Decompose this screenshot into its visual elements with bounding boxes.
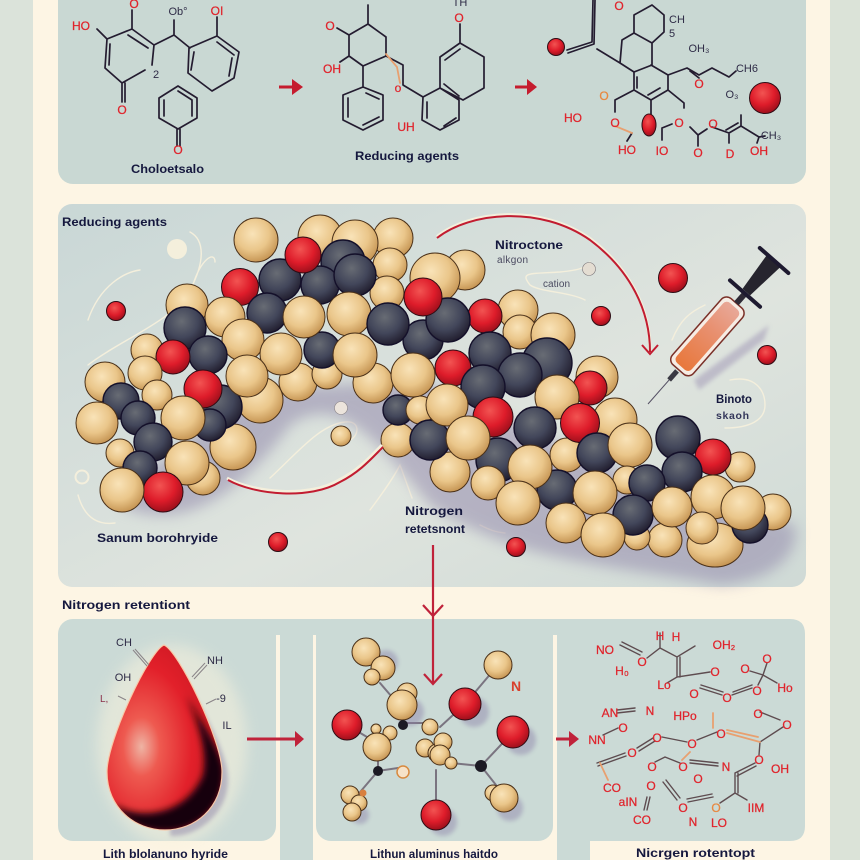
- label: reducing agents: Reducing agents: [355, 149, 459, 163]
- structure: product molecule: [548, 0, 781, 161]
- label: nitroctone: Nitroctone: [495, 238, 563, 252]
- structure: starting molecule: [72, 0, 239, 157]
- arrow: step one: [279, 79, 303, 95]
- atom labels: Lo: [657, 678, 671, 692]
- label: cation: cation: [543, 279, 570, 290]
- structure: starting molecule: HO: [72, 19, 90, 33]
- structure: product molecule: O: [599, 89, 609, 103]
- atom labels: O: [646, 779, 656, 793]
- caption tab: nitrogen retentiont: Nicrgen rotentopt: [636, 846, 755, 860]
- drop shadow: [170, 660, 228, 836]
- structure: product molecule: 5: [669, 28, 675, 40]
- structure: intermediate molecule: UH: [397, 120, 415, 134]
- structure: product molecule: HO: [564, 111, 582, 125]
- structure: intermediate molecule: OH: [323, 62, 341, 76]
- label: cholesterol: Choloetsalo: [131, 162, 204, 176]
- atom labels: N: [722, 760, 730, 774]
- annotations around drop: OH: [115, 672, 131, 684]
- atom labels: CO: [603, 781, 621, 795]
- annotations around drop: [100, 637, 232, 732]
- atom labels: O: [711, 801, 721, 815]
- atom labels: O: [752, 684, 762, 698]
- structure: product molecule: CH6: [736, 63, 758, 75]
- structure: starting molecule: OI: [211, 4, 223, 18]
- decorative cream swirls: [76, 232, 765, 533]
- curved arrow: upper: [437, 215, 658, 354]
- atom labels: O: [710, 665, 720, 679]
- caption tab: nitrogen retentiont: [590, 841, 830, 860]
- molecule shadow: [120, 380, 796, 585]
- atom labels: H: [656, 629, 664, 643]
- structure: intermediate molecule: O: [454, 11, 464, 25]
- sticks: [347, 665, 513, 800]
- atoms: [332, 638, 529, 830]
- atoms shadows: [351, 650, 536, 836]
- structure: intermediate molecule: [323, 0, 484, 134]
- atom labels: O: [652, 731, 662, 745]
- atom labels: OH₂: [713, 638, 736, 652]
- atom labels: O: [678, 801, 688, 815]
- label: alkgon: alkgon: [497, 255, 528, 266]
- arrow: vertical from centre: [423, 545, 443, 684]
- structure: product molecule: CH₃: [761, 130, 781, 142]
- structure: product molecule: OH: [750, 144, 768, 158]
- atom labels: HPo: [673, 709, 697, 723]
- annotations around drop: IL: [222, 720, 232, 732]
- molecule: large space-filling cluster: [76, 215, 791, 567]
- atom labels: LO: [711, 816, 727, 830]
- label: retentiont: retetsnont: [405, 522, 465, 536]
- atom labels: CO: [633, 813, 651, 827]
- label: nitrogen retentiont middle: Nitrogen: [405, 504, 463, 518]
- atom labels: N: [646, 704, 654, 718]
- structure: product molecule: O: [674, 116, 684, 130]
- atom labels: AN: [602, 706, 618, 720]
- annotations around drop: CH: [116, 637, 132, 649]
- atom labels: IIM: [748, 801, 764, 815]
- atom labels: O: [753, 707, 763, 721]
- atom labels: O: [678, 760, 688, 774]
- arrow: step two: [515, 79, 537, 95]
- atom labels: N: [689, 815, 697, 829]
- label: binoto: Binoto: [716, 392, 752, 406]
- structure: starting molecule: Ob°: [168, 6, 188, 18]
- structure: product molecule: O: [694, 77, 704, 91]
- atom labels: OH: [771, 762, 789, 776]
- panel: reducing agents molecule: [58, 204, 806, 587]
- atom labels: O: [687, 737, 697, 751]
- label: reducing agents: Reducing agents: [62, 215, 167, 229]
- curved arrow: lower: [227, 445, 383, 494]
- bonds: [597, 633, 783, 810]
- annotations around drop: L,: [100, 694, 108, 705]
- atom: small red drop: [642, 114, 656, 136]
- atom labels: O: [637, 655, 647, 669]
- structure: product molecule: O: [693, 146, 703, 160]
- structure: intermediate molecule: o: [395, 81, 402, 95]
- structure: product molecule: D: [726, 147, 735, 161]
- atom labels: O: [693, 772, 703, 786]
- icon: syringe: [631, 244, 792, 419]
- annotations around drop: NH: [207, 655, 223, 667]
- atom labels: NO: [596, 643, 614, 657]
- annotations around drop: -9: [216, 693, 226, 705]
- atom labels: O: [740, 662, 750, 676]
- atom labels: O: [647, 760, 657, 774]
- panel: lithium borohydride drop: [58, 619, 276, 845]
- atom labels: O: [762, 652, 772, 666]
- atom labels: O: [722, 691, 732, 705]
- atom labels: O: [627, 746, 637, 760]
- structure: product molecule: O: [610, 116, 620, 130]
- atom labels: NN: [588, 733, 606, 747]
- atom: red sphere: [548, 38, 564, 56]
- structure: product molecule: O₃: [725, 89, 739, 101]
- loose red atoms: [106, 262, 776, 556]
- atom labels: H₀: [615, 664, 629, 678]
- panel: nitrogen retentiont fragments: [557, 619, 805, 841]
- panel: lithium aluminium hydride ball and stick: N: [511, 678, 521, 694]
- atom labels: O: [716, 727, 726, 741]
- heading: nitrogen retentiont: Nitrogen retentiont: [62, 598, 190, 612]
- atom labels: O: [782, 718, 792, 732]
- structure: product molecule: O: [708, 117, 718, 131]
- atom labels: O: [618, 721, 628, 735]
- structure: starting molecule: O: [117, 103, 127, 117]
- atom labels: O: [754, 753, 764, 767]
- atom: big red sphere: [750, 82, 780, 114]
- atom labels: H: [672, 630, 680, 644]
- structure: starting molecule: O: [173, 143, 183, 157]
- icon: red drop: [107, 645, 224, 832]
- strips between lower panels: [262, 619, 590, 860]
- arrow: structure to fragments: [556, 731, 579, 747]
- atom labels: [588, 629, 793, 830]
- label: skaoh: skaoh: [716, 410, 749, 422]
- atom labels: aIN: [619, 795, 637, 809]
- structure: product molecule: OH₃: [689, 43, 709, 55]
- structure: product molecule: IO: [656, 144, 668, 158]
- atom labels: O: [689, 687, 699, 701]
- structure: product molecule: CH: [669, 14, 685, 26]
- panel: lithium aluminium hydride ball and stick: [316, 619, 553, 841]
- arrow: drop to structure: [247, 731, 304, 747]
- structure: intermediate molecule: O: [325, 19, 335, 33]
- label: sodium borohydride: Sanum borohryide: [97, 531, 218, 545]
- panel: top reaction sequence: [58, 0, 806, 184]
- structure: starting molecule: 2: [153, 69, 159, 81]
- structure: product molecule: HO: [618, 143, 636, 157]
- atom labels: Ho: [777, 681, 793, 695]
